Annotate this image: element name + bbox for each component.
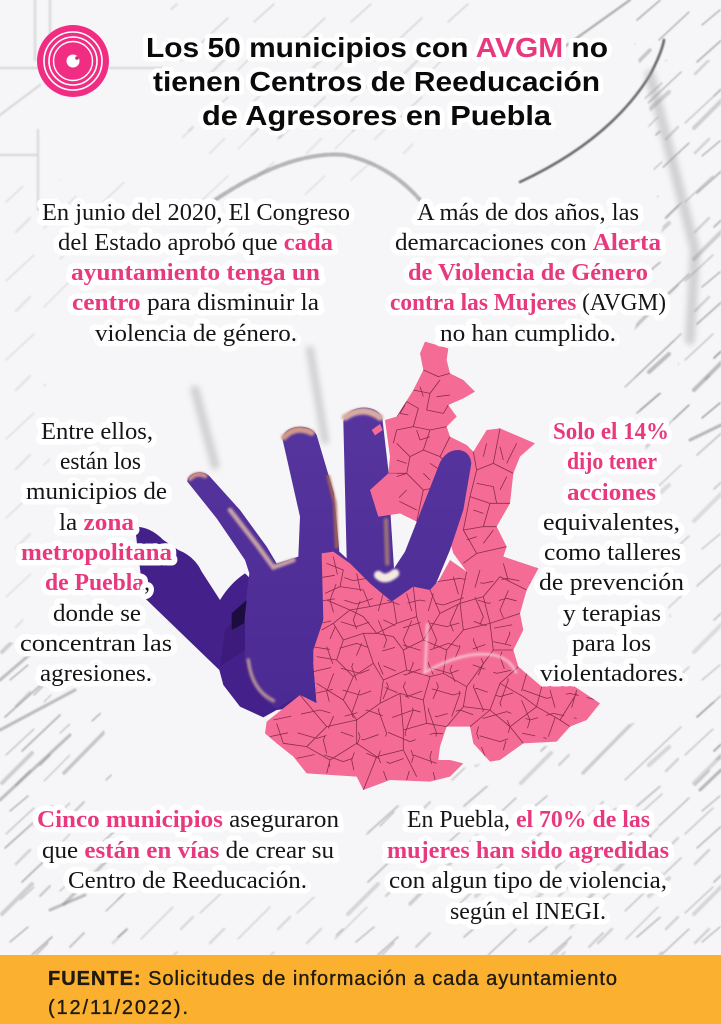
text block: zona metropolitana: metropolitana (21, 540, 172, 566)
text block: zona metropolitana: Entre ellos, (41, 419, 153, 445)
text block: cinco municipios (37, 807, 339, 894)
text block: solo el 14%: de prevención (539, 570, 684, 596)
text block: zona metropolitana: agresiones. (40, 661, 152, 687)
text block: congreso: En junio del 2020, El Congreso (42, 200, 350, 226)
title: Los 50 municipios con AVGM no (146, 32, 608, 63)
text block: congreso (42, 200, 350, 347)
sleeve (135, 527, 303, 717)
text block: solo el 14%: y terapias (563, 601, 661, 627)
text block: congreso: ayuntamiento tenga un (71, 260, 320, 286)
text block: 70% de las mujeres: En Puebla, el 70% de las (407, 807, 650, 833)
finger highlights (190, 411, 395, 701)
text block: zona metropolitana (20, 419, 172, 687)
text block: zona metropolitana: municipios de (26, 479, 167, 505)
text block: zona metropolitana: concentran las (20, 631, 172, 657)
text block: solo el 14%: Solo el 14% (553, 419, 669, 445)
text block: congreso: centro para disminuir la (72, 290, 319, 316)
text block: alerta de violencia: demarcaciones con Alerta (395, 230, 661, 256)
text block: zona metropolitana: de Puebla, (45, 570, 150, 596)
text block: 70% de las mujeres: según el INEGI. (450, 899, 606, 925)
text block: congreso: del Estado aprobó que cada (58, 230, 333, 256)
text block: alerta de violencia: A más de dos años, las (417, 200, 639, 226)
text block: solo el 14%: como talleres (544, 540, 681, 566)
footer source bar: (12/11/2022). (48, 997, 188, 1019)
text block: alerta de violencia: no han cumplido. (440, 321, 616, 347)
text block: cinco municipios: que están en vías de crear su (42, 838, 334, 864)
map of Puebla: southern municipalities (265, 552, 600, 790)
text block: 70% de las mujeres: mujeres han sido agredidas (387, 838, 669, 864)
text block: 70% de las mujeres: con algun tipo de violencia, (389, 868, 667, 894)
text block: solo el 14%: acciones (567, 480, 656, 506)
text block: solo el 14%: dijo tener (567, 449, 657, 475)
text block: solo el 14%: violentadores. (540, 661, 684, 687)
text block: solo el 14%: equivalentes, (543, 510, 680, 536)
text block: solo el 14%: para los (572, 631, 651, 657)
text block: zona metropolitana: donde se (53, 601, 141, 627)
text block: 70% de las mujeres (387, 807, 669, 925)
footer source bar: FUENTE: Solicitudes de información a cada ayuntamiento (48, 968, 617, 990)
text block: alerta de violencia: de Violencia de Género (408, 260, 648, 286)
title: de Agresores en Puebla (202, 100, 551, 131)
text block: congreso: violencia de género. (95, 321, 297, 347)
footer source bar (0, 955, 721, 1024)
text block: zona metropolitana: la zona (59, 510, 134, 536)
logo: concentric pink circle (37, 25, 109, 97)
text block: alerta de violencia: contra las Mujeres (AVGM) (390, 290, 666, 316)
text block: alerta de violencia (390, 200, 666, 347)
palm and fingers (187, 407, 471, 708)
title: tienen Centros de Reeducación (153, 66, 600, 97)
map fragment over the ring finger (370, 424, 407, 517)
text block: zona metropolitana: están los (60, 449, 141, 475)
text block: cinco municipios: Cinco municipios aseguraron (37, 807, 339, 833)
hand raised in purple (135, 407, 471, 717)
text block: solo el 14% (539, 419, 684, 687)
light streak over map (423, 623, 517, 673)
text block: cinco municipios: Centro de Reeducación. (68, 868, 307, 894)
map of Puebla: northern municipalities (385, 342, 538, 590)
title (146, 32, 608, 131)
